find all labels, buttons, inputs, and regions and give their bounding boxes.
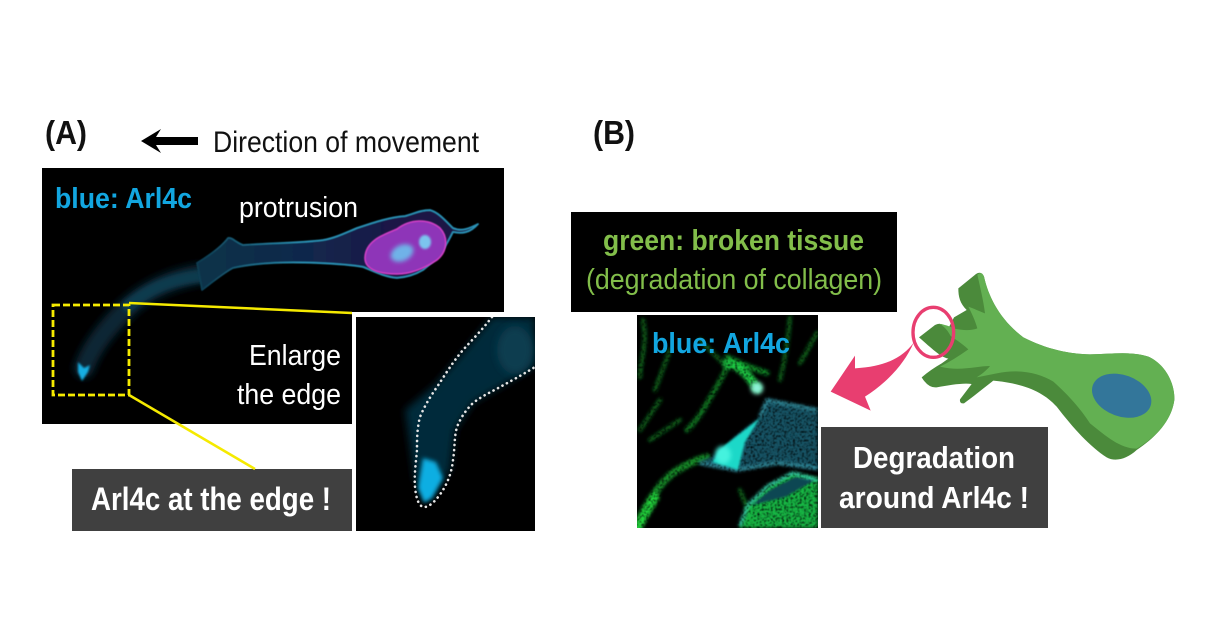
bright tip bbox=[418, 458, 443, 503]
callout: Arl4c at the edge: Arl4c at the edge ! bbox=[91, 481, 331, 517]
heading: panel A label: (A) bbox=[45, 114, 87, 151]
panel: broken tissue legend bbox=[571, 212, 897, 312]
callout: degradation around Arl4c bbox=[821, 427, 1048, 528]
dotted outline bbox=[415, 317, 535, 507]
cell body bbox=[197, 210, 478, 290]
nucleus bbox=[1086, 366, 1158, 426]
callout: degradation around Arl4c: Degradation bbox=[853, 440, 1015, 475]
panel: enlarged edge inset bbox=[356, 317, 535, 531]
text: enlarge the edge: Enlarge bbox=[249, 340, 341, 372]
lower right cell bbox=[739, 473, 818, 528]
faint cell tail bbox=[84, 274, 200, 368]
nucleus bbox=[365, 221, 446, 274]
text: enlarge the edge bbox=[237, 340, 341, 411]
label: protrusion: protrusion bbox=[239, 192, 358, 224]
icon: green cell bbox=[919, 273, 1174, 460]
panel: broken tissue legend: (degradation of collagen) bbox=[586, 264, 882, 296]
text: direction of movement: Direction of movement bbox=[213, 126, 480, 159]
panel: cell micrograph A bbox=[42, 168, 504, 424]
zoom box: dashed yellow region bbox=[53, 303, 352, 469]
panel: collagen micrograph B bbox=[637, 315, 818, 528]
cell lit top bbox=[937, 273, 1174, 449]
cell shadow side bbox=[919, 273, 1174, 460]
panel: broken tissue legend: green: broken tissue bbox=[603, 225, 864, 257]
green fibres bbox=[637, 317, 817, 528]
callout: Arl4c at the edge bbox=[72, 469, 352, 531]
bright tip bbox=[78, 362, 90, 381]
heading: panel B label: (B) bbox=[593, 114, 635, 151]
arrow: direction of movement bbox=[141, 129, 198, 153]
text: enlarge the edge: the edge bbox=[237, 379, 341, 411]
icon: pink arrow and highlight circle bbox=[831, 307, 954, 411]
cell in blue bbox=[697, 400, 818, 470]
callout: degradation around Arl4c: around Arl4c ! bbox=[839, 480, 1029, 515]
faint signal bbox=[405, 317, 535, 500]
label: blue Arl4c on micrograph: blue: Arl4c bbox=[652, 328, 790, 360]
label: blue Arl4c: blue: Arl4c bbox=[55, 183, 192, 215]
